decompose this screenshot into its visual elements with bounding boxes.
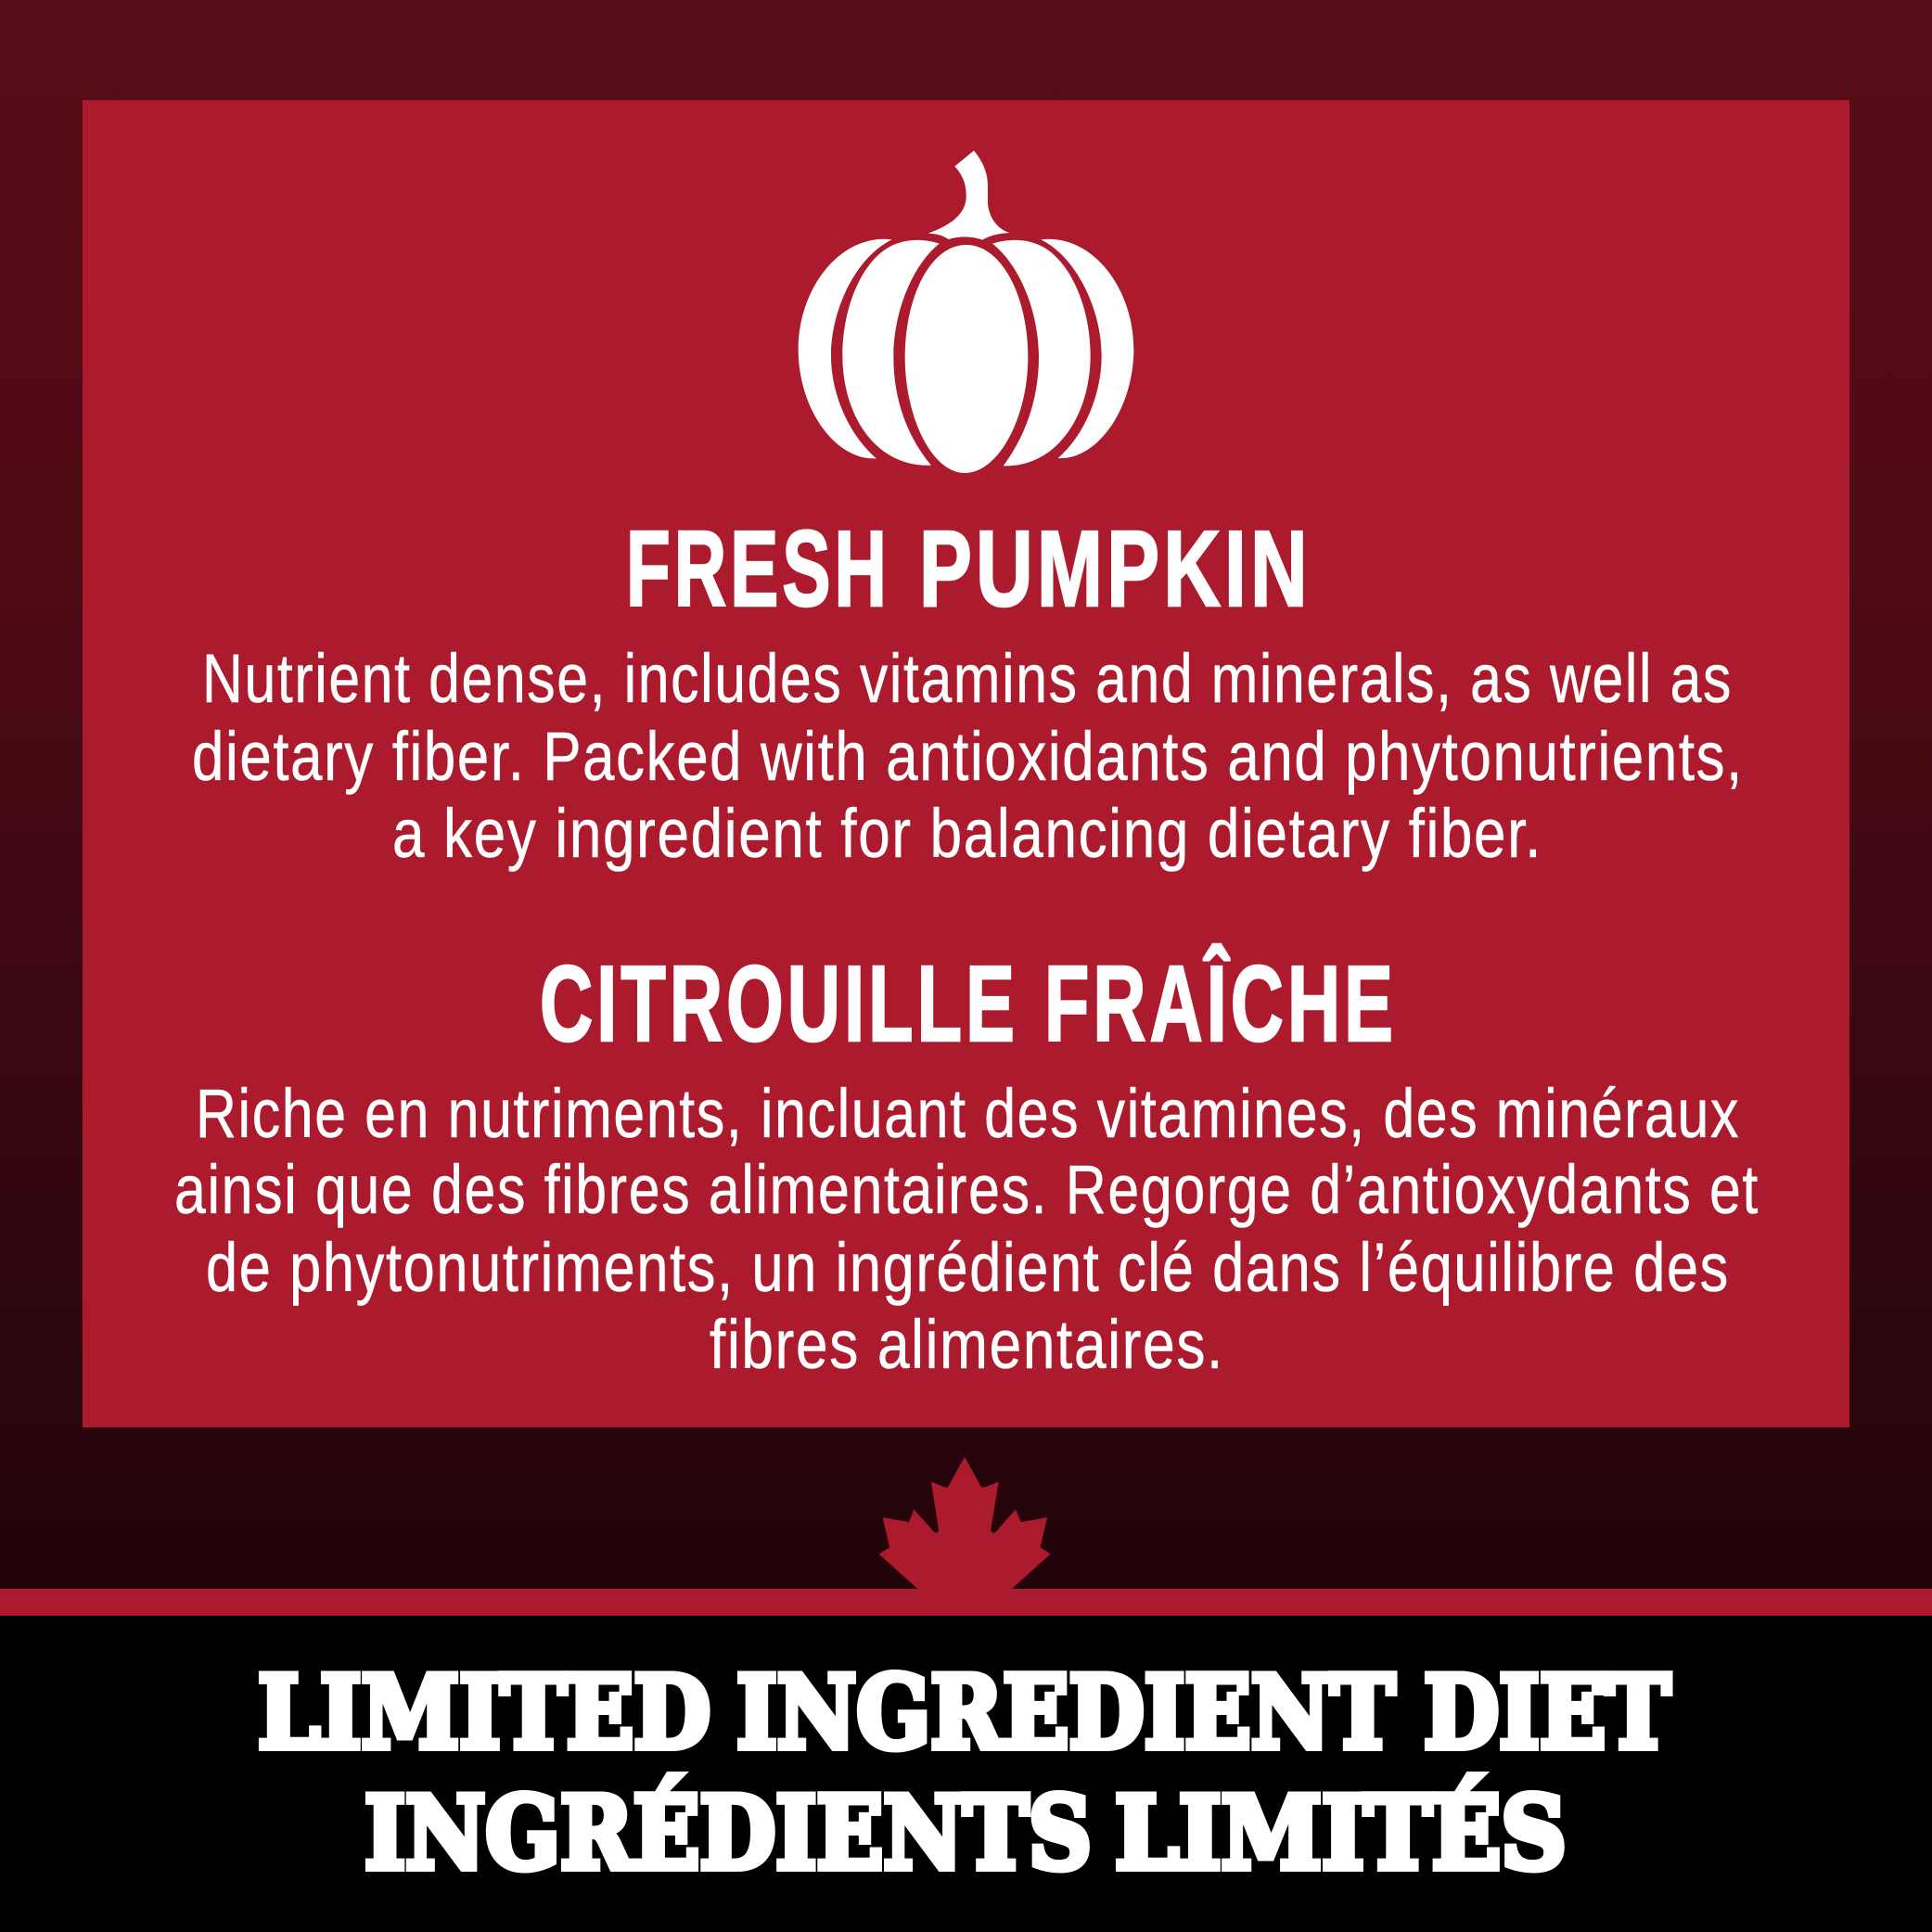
text block: english description bbox=[192, 640, 1744, 872]
footer title french: LIMITÉS bbox=[1115, 1774, 1567, 1892]
footer title french: INGRÉDIENTS bbox=[365, 1774, 1092, 1892]
footer title english: LIMITED bbox=[258, 1655, 710, 1772]
footer: black bar with product line title bbox=[0, 1616, 1932, 1932]
text block: french description bbox=[174, 1075, 1759, 1383]
heading: fresh pumpkin: FRESH bbox=[626, 508, 890, 629]
footer title english: DIET bbox=[1424, 1655, 1670, 1772]
heading: citrouille fraiche: FRAÎCHE bbox=[1044, 943, 1397, 1064]
panel: main red card bbox=[83, 100, 1849, 1427]
text block: french description: fibres alimentaires. bbox=[710, 1306, 1224, 1383]
heading: fresh pumpkin: PUMPKIN bbox=[919, 508, 1311, 629]
footer title english bbox=[258, 1655, 1670, 1772]
icon: pumpkin bbox=[799, 150, 1133, 473]
heading: citrouille fraiche: CITROUILLE bbox=[540, 943, 1018, 1064]
text block: english description: a key ingredient for balancing dietary fiber. bbox=[392, 795, 1542, 872]
heading: fresh pumpkin bbox=[626, 508, 1311, 629]
icon: maple leaf bbox=[879, 1457, 1050, 1589]
footer title french bbox=[365, 1774, 1567, 1892]
red band bbox=[0, 1589, 1932, 1616]
footer title english: INGREDIENT bbox=[736, 1655, 1395, 1772]
